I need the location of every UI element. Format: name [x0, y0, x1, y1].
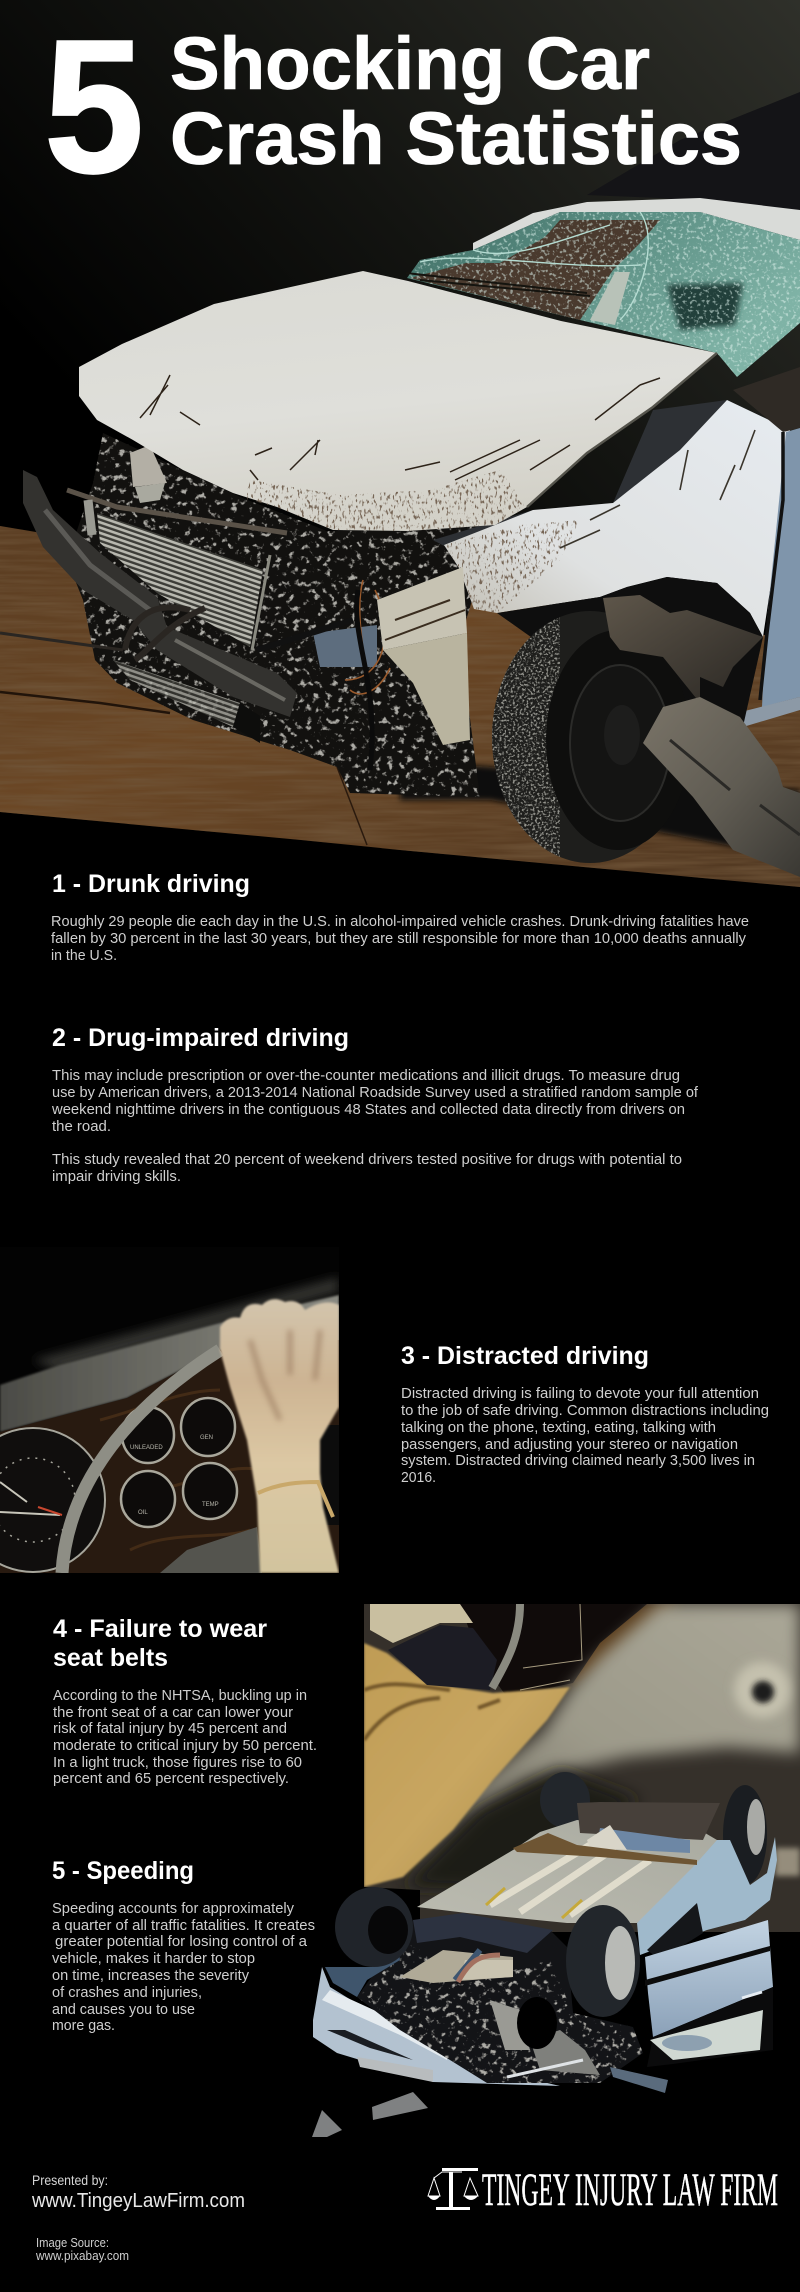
body 4: percent and 65 percent respectively.	[53, 1771, 289, 1787]
mustard jacket	[364, 1643, 570, 1887]
hand and forearm	[220, 1299, 339, 1573]
gauge labels: TEMP	[202, 1502, 219, 1508]
section 5: speeding	[52, 1857, 315, 2034]
body 3: 2016.	[401, 1470, 436, 1486]
gold bracelet	[258, 1482, 333, 1517]
large speedometer	[0, 1428, 105, 1572]
body 4: moderate to critical injury by 50 percent.	[53, 1738, 317, 1754]
logo: Tingey Injury Law Firm	[428, 2164, 778, 2216]
background: dark trees	[0, 0, 800, 530]
hero photo: crashed white car on a flatbed	[0, 0, 800, 890]
roof	[473, 198, 800, 250]
title	[44, 1, 742, 213]
door opening	[647, 1903, 703, 1960]
body 1	[51, 914, 749, 964]
footer: presented by: www.TingeyLawFirm.com	[31, 2190, 245, 2212]
body 2	[51, 1068, 699, 1185]
gauge labels	[130, 1435, 219, 1516]
icon: scales of justice	[428, 2168, 478, 2210]
section 2: drug-impaired driving	[51, 1024, 699, 1185]
lower right band	[775, 1848, 800, 1876]
dark shadow near car	[403, 1770, 640, 1890]
body 3: system. Distracted driving claimed nearly 3,500 lives in	[401, 1453, 755, 1469]
white fluid reservoir and bent panel	[377, 567, 470, 745]
overturned blue car	[312, 1772, 777, 2137]
blue fuel tank	[597, 1828, 690, 1853]
underbody	[417, 1820, 717, 1923]
body 2: This may include prescription or over-the-counter medications and illicit drugs. To measure drug	[52, 1068, 680, 1084]
gauge labels: UNLEADED	[130, 1445, 163, 1451]
body 5: on time, increases the severity	[52, 1968, 250, 1984]
front fender and door	[440, 367, 800, 727]
body 3: Distracted driving is failing to devote your full attention	[401, 1386, 759, 1402]
footer: presented by: Presented by:	[32, 2172, 108, 2188]
body 5	[52, 1901, 315, 2034]
body 2: use by American drivers, a 2013-2014 National Roadside Survey used a stratified random sample of	[52, 1085, 699, 1101]
body 5: more gas.	[52, 2018, 115, 2034]
heading 1: 1 - Drunk driving	[52, 870, 250, 898]
body 5: of crashes and injuries,	[52, 1985, 202, 2001]
footer: image source	[35, 2236, 129, 2263]
radiator with frame	[67, 490, 287, 743]
body 4: the front seat of a car can lower your	[53, 1705, 293, 1721]
rusty cross beam	[513, 1833, 697, 1865]
body 5: greater potential for losing control of a	[55, 1934, 308, 1950]
body 5: Speeding accounts for approximately	[52, 1901, 295, 1917]
big numeral 5: 5	[44, 1, 144, 213]
knuckles	[250, 1330, 320, 1420]
brown background	[572, 1604, 670, 1685]
footer: image source: Image Source:	[36, 2236, 109, 2250]
body 2: This study revealed that 20 percent of weekend drivers tested positive for drugs with potential to	[52, 1152, 682, 1168]
dark body shadow over the deck	[396, 762, 800, 850]
body 4: In a light truck, those figures rise to 60	[53, 1755, 302, 1771]
exhaust bar	[610, 2067, 668, 2093]
wood dash panel	[0, 1340, 339, 1573]
right dial	[318, 1425, 339, 1525]
body 2: the road.	[52, 1119, 111, 1135]
body 4	[53, 1688, 317, 1787]
photo: hand on steering wheel and dashboard	[0, 1247, 339, 1573]
title line 2: Crash Statistics	[170, 97, 742, 180]
dark cuff	[388, 1625, 497, 1690]
lower spoke	[160, 1527, 262, 1573]
footer: image source: www.pixabay.com	[35, 2249, 129, 2263]
sleeve	[370, 1604, 473, 1643]
body 4: According to the NHTSA, buckling up in	[53, 1688, 307, 1704]
steering wheel rim	[492, 1604, 520, 1688]
hood	[79, 271, 717, 535]
heading 3: 3 - Distracted driving	[401, 1342, 649, 1370]
body 5: vehicle, makes it harder to stop	[52, 1951, 255, 1967]
fender dark gap	[433, 400, 727, 560]
body 3	[401, 1386, 769, 1486]
body 2: weekend nighttime drivers in the contiguous 48 States and collected data directly from drivers on	[51, 1102, 685, 1118]
tow chain and cable	[0, 607, 205, 660]
footer: presented by	[31, 2172, 245, 2212]
body 3: passengers, and adjusting your stereo or navigation	[401, 1437, 738, 1453]
body 2: impair driving skills.	[52, 1169, 181, 1185]
upper dash strip	[33, 1277, 339, 1372]
engine bay	[60, 430, 500, 800]
section 3: distracted driving	[401, 1342, 769, 1486]
gauge labels: GEN	[200, 1435, 213, 1441]
dashboard top ledge	[0, 1295, 339, 1432]
section 1: drunk driving	[51, 870, 749, 964]
dark dashboard	[460, 1604, 647, 1697]
rear wheels	[540, 1772, 767, 1885]
gauges	[121, 1398, 237, 1527]
blue side body	[637, 1837, 777, 1955]
gauge labels: OIL	[138, 1510, 148, 1516]
title line 1: Shocking Car	[170, 22, 650, 105]
body 3: talking on the phone, texting, eating, talking with	[401, 1420, 716, 1436]
steering wheel rim	[62, 1350, 220, 1573]
torn wheel-arch liner	[603, 595, 800, 877]
heading 4	[53, 1615, 267, 1672]
bumper	[23, 470, 297, 717]
heading 5: 5 - Speeding	[52, 1857, 194, 1885]
blurred seat belt	[421, 1604, 800, 1863]
body 3: to the job of safe driving. Common distractions including	[401, 1403, 769, 1419]
body 1: Roughly 29 people die each day in the U.S. in alcohol-impaired vehicle crashes. Drunk-driving fatalities have	[51, 914, 749, 930]
flatbed ground	[0, 520, 800, 890]
body 1: fallen by 30 percent in the last 30 years, but they are still responsible for more than 10,000 deaths annually	[51, 931, 747, 947]
front tyre and black wheel	[490, 610, 690, 865]
jacket folds	[364, 1684, 500, 1740]
open door	[645, 1920, 773, 2067]
body 5: a quarter of all traffic fatalities. It creates	[52, 1918, 315, 1934]
heading 2: 2 - Drug-impaired driving	[52, 1024, 349, 1052]
debris pieces	[312, 2092, 428, 2137]
dashboard trim lines	[520, 1604, 582, 1690]
rear axle	[577, 1802, 720, 1840]
body 1: in the U.S.	[51, 948, 117, 964]
body 4: risk of fatal injury by 45 percent and	[53, 1721, 287, 1737]
engine bay	[325, 1913, 650, 2085]
wheel arch shadow	[497, 577, 763, 722]
seat belt ring	[734, 1662, 790, 1718]
heading 4: 4 - Failure to wear	[53, 1615, 267, 1643]
heading 4: seat belts	[53, 1644, 168, 1672]
body 5: and causes you to use	[52, 2002, 195, 2018]
section 4: seat belts	[53, 1615, 317, 1787]
white cloth	[587, 1825, 627, 1850]
front wheels	[335, 1887, 640, 2017]
front bumper	[313, 1967, 560, 2086]
shattered windshield	[400, 200, 800, 380]
photo: blurred seat belt and mustard jacket	[364, 1604, 800, 1932]
